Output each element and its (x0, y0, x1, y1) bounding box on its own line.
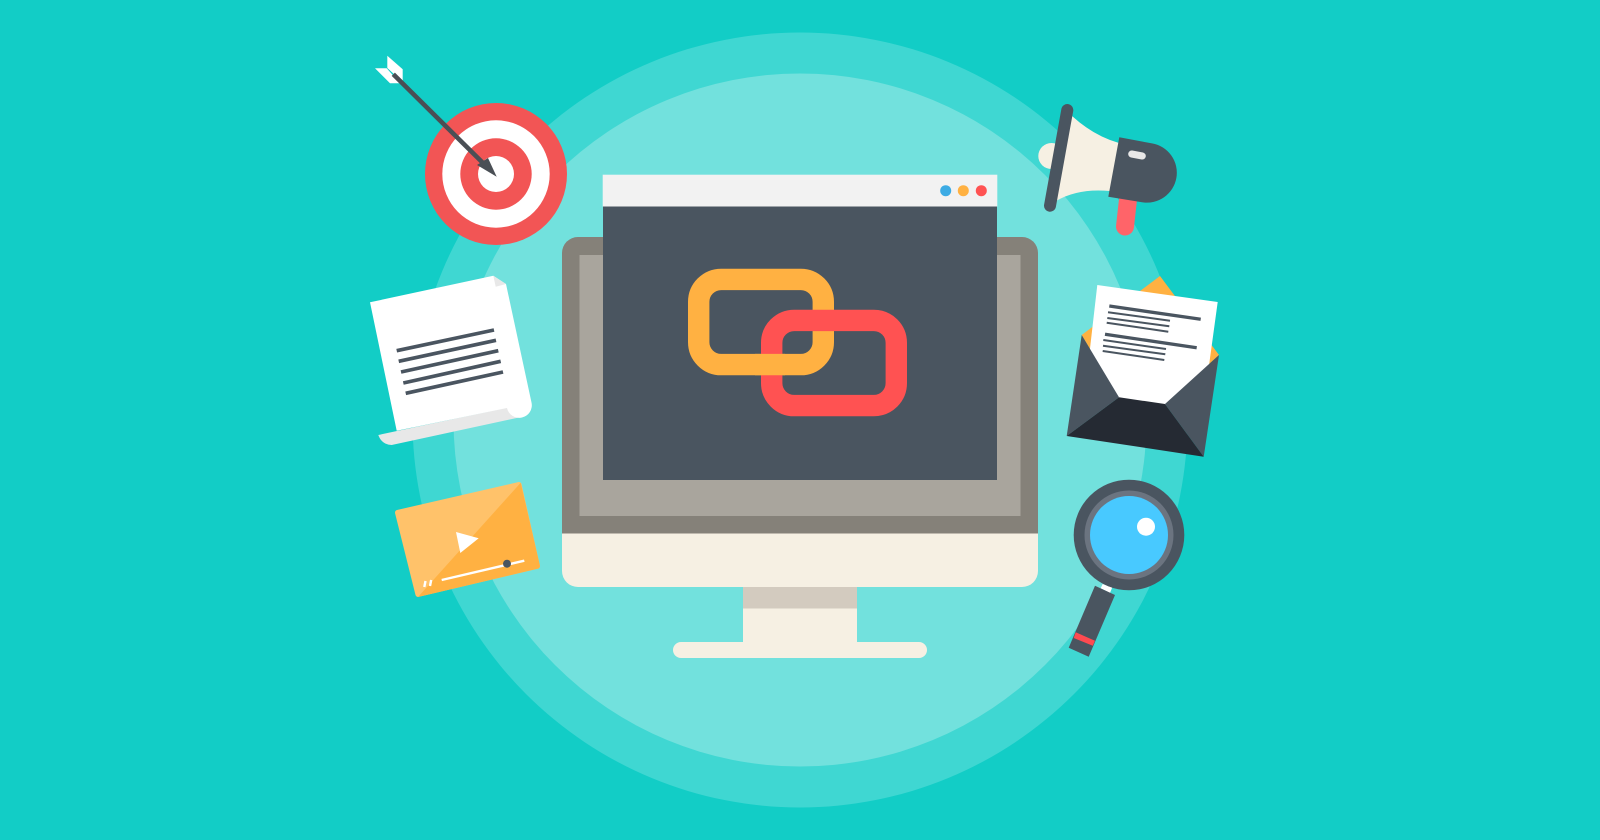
icon: envelope with letter (1067, 276, 1219, 457)
icon: video player (395, 482, 540, 597)
inner circle (454, 74, 1146, 766)
monitor body (562, 237, 1038, 587)
envelope back (1082, 276, 1219, 404)
letter (1085, 285, 1218, 405)
browser title bar (603, 175, 997, 206)
browser window (603, 175, 997, 480)
megaphone rim (1050, 110, 1067, 206)
browser dots (940, 185, 987, 196)
megaphone handle (1125, 195, 1128, 226)
megaphone button (1132, 154, 1142, 156)
icon: paper document (370, 276, 532, 445)
megaphone body (1108, 137, 1177, 203)
icon: chain link (699, 279, 896, 406)
megaphone cone (1056, 116, 1119, 201)
envelope flaps (1067, 335, 1119, 436)
document lines (397, 330, 503, 393)
icon: magnifying glass (1069, 480, 1184, 657)
browser content (603, 206, 997, 480)
monitor screen (580, 255, 1020, 516)
illustration (370, 32, 1219, 808)
monitor (562, 237, 1038, 658)
letter lines (1103, 306, 1201, 360)
icon: target with arrow (375, 56, 567, 245)
monitor stand (673, 585, 927, 658)
icon: megaphone (1038, 110, 1177, 226)
megaphone back (1038, 143, 1065, 169)
outer circle (412, 32, 1188, 808)
